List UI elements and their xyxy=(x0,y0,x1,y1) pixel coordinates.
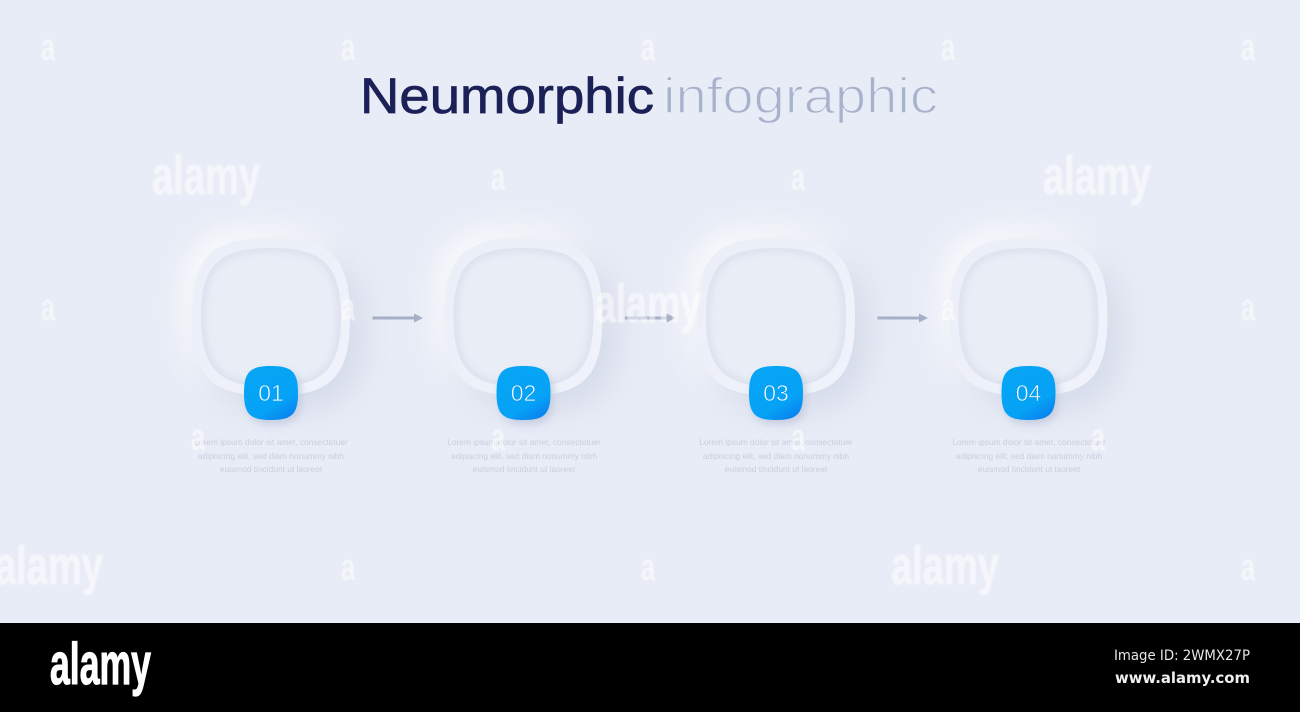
watermarks: alamy xyxy=(891,536,999,596)
badge 01: 01 xyxy=(258,380,284,406)
frame 4 xyxy=(942,230,1120,409)
description 4: euismod tincidunt ut laoreet xyxy=(978,464,1081,474)
watermarks: a xyxy=(791,417,806,459)
watermarks: a xyxy=(641,547,656,589)
watermarks xyxy=(0,27,1256,596)
step 3 xyxy=(689,230,868,474)
watermarks: alamy xyxy=(152,146,260,206)
watermarks: alamy xyxy=(1043,146,1151,206)
badge 04 xyxy=(1002,366,1058,424)
frame 3 xyxy=(689,230,868,409)
arrow 3 xyxy=(878,314,928,322)
watermarks: a xyxy=(341,547,356,589)
step 2 xyxy=(436,230,616,474)
badge 03: 03 xyxy=(763,380,789,406)
description 2: adipiscing elit, sed diam nonummy nibh xyxy=(451,451,597,461)
description 3 xyxy=(699,437,853,474)
website: www.alamy.com xyxy=(1115,669,1250,687)
watermarks: a xyxy=(341,27,356,69)
watermarks: a xyxy=(41,287,56,329)
badge 03 xyxy=(749,366,806,424)
badge 01 xyxy=(244,366,301,424)
description 2: Lorem ipsum dolor sit amet, consectetuer xyxy=(447,437,601,447)
description 2: euismod tincidunt ut laoreet xyxy=(473,464,576,474)
frame 2 xyxy=(436,230,616,409)
description 1: euismod tincidunt ut laoreet xyxy=(220,464,323,474)
watermarks: a xyxy=(191,417,206,459)
frame 1 xyxy=(184,230,363,409)
arrow 2 xyxy=(625,314,676,322)
watermarks: a xyxy=(941,287,956,329)
description 3: Lorem ipsum dolor sit amet, consectetuer xyxy=(699,437,853,447)
watermarks: a xyxy=(1241,547,1256,589)
description 1: Lorem ipsum dolor sit amet, consectetuer xyxy=(194,437,348,447)
watermarks: a xyxy=(341,287,356,329)
footer band xyxy=(0,623,1300,712)
description 4 xyxy=(952,437,1106,474)
arrow 1 xyxy=(372,314,423,322)
watermarks: a xyxy=(1241,287,1256,329)
description 4: adipiscing elit, sed diam nonummy nibh xyxy=(956,451,1102,461)
image id: Image ID: 2WMX27P xyxy=(1114,648,1250,664)
description 3: euismod tincidunt ut laoreet xyxy=(725,464,828,474)
watermarks: a xyxy=(791,157,806,199)
watermarks: a xyxy=(941,27,956,69)
badge 02 xyxy=(496,366,554,424)
badge 04: 04 xyxy=(1016,380,1041,406)
step 4 xyxy=(942,230,1120,474)
step 1 xyxy=(184,230,363,474)
watermarks: a xyxy=(41,27,56,69)
title: Neumorphic xyxy=(360,68,654,124)
description 2 xyxy=(447,437,601,474)
watermarks: a xyxy=(491,417,506,459)
watermarks: alamy xyxy=(595,274,701,334)
watermarks: a xyxy=(1091,417,1106,459)
watermarks: a xyxy=(1241,27,1256,69)
description 1 xyxy=(194,437,348,474)
watermarks: a xyxy=(491,157,506,199)
description 4: Lorem ipsum dolor sit amet, consectetuer xyxy=(952,437,1106,447)
description 3: adipiscing elit, sed diam nonummy nibh xyxy=(703,451,849,461)
watermarks: a xyxy=(641,27,656,69)
footer logo: alamy xyxy=(50,632,151,697)
title: infographic xyxy=(663,68,938,124)
description 1: adipiscing elit, sed diam nonummy nibh xyxy=(198,451,344,461)
title xyxy=(360,68,938,124)
badge 02: 02 xyxy=(511,380,536,406)
